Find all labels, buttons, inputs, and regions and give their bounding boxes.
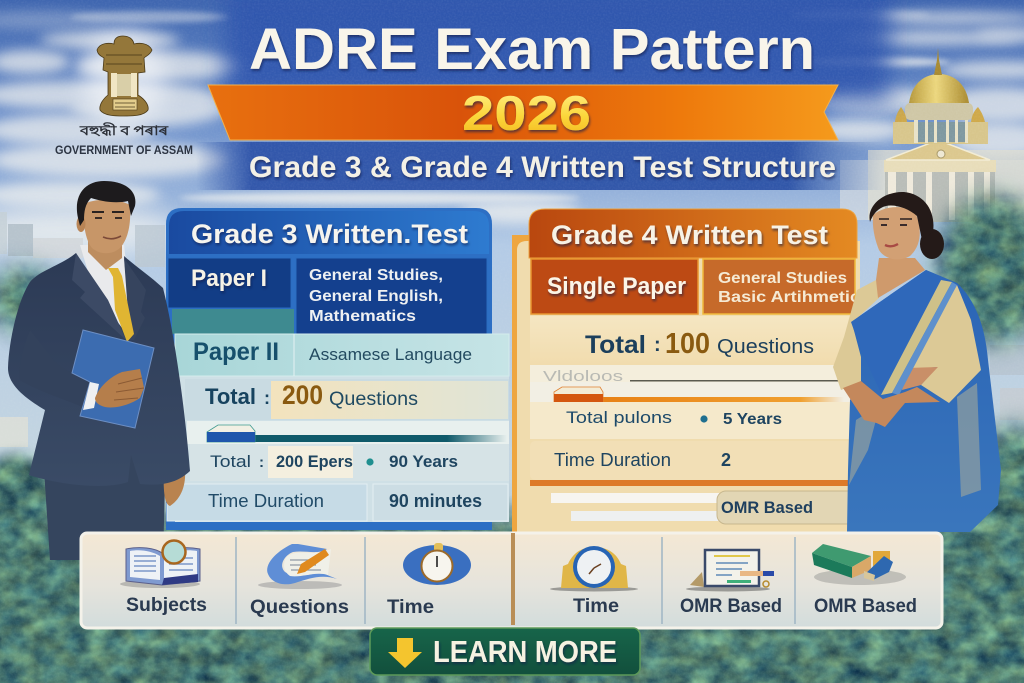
single paper subjects: Basic Artihmetic	[718, 289, 860, 306]
city buildings left	[0, 212, 165, 447]
midriff	[902, 367, 938, 390]
icon: paper and pencil	[258, 544, 342, 589]
panel background	[166, 208, 492, 530]
paper I subjects: General Studies,	[309, 267, 443, 284]
government label: GOVERNMENT OF ASSAM	[55, 143, 193, 157]
paper I cell	[168, 258, 291, 308]
time duration row	[530, 441, 860, 480]
icon: tablet with pen	[686, 550, 774, 592]
icon: stacked books	[812, 544, 906, 585]
figure: woman in blue saree	[833, 192, 1001, 532]
saree pallu	[851, 270, 956, 395]
single paper subjects: General Studies	[718, 270, 847, 287]
neck	[876, 258, 925, 298]
neck and shirt	[80, 245, 133, 345]
total papers row: 90 Years	[389, 452, 458, 471]
divider strip with book tab	[187, 421, 509, 444]
motto line: বহুদ্ধী ব পৰাৰ	[79, 122, 169, 138]
bullet	[700, 415, 708, 423]
total papers row: 200 Epers	[276, 452, 353, 471]
item: OMR based	[812, 544, 917, 617]
total pulons row	[530, 402, 860, 439]
item: subjects: Subjects	[126, 595, 207, 616]
total questions row	[530, 316, 860, 365]
total papers row: :	[259, 454, 264, 471]
eyes and smile	[92, 211, 124, 213]
icon: stopwatch on blue oval	[403, 543, 471, 585]
OMR based pill: OMR Based	[721, 498, 813, 517]
right blouse	[907, 285, 981, 403]
total questions row: Questions	[329, 389, 418, 410]
total questions row: Questions	[717, 336, 814, 358]
item: OMR based: OMR Based	[814, 596, 917, 617]
total questions row	[185, 379, 509, 420]
panel: grade 4 written test	[512, 209, 860, 533]
lapels	[72, 253, 126, 340]
trousers	[44, 445, 166, 560]
total pulons row: 5 Years	[723, 411, 782, 428]
tie	[108, 268, 134, 342]
gold stripe	[881, 280, 952, 395]
time duration row: Time Duration	[554, 450, 671, 470]
single paper subjects	[703, 259, 860, 314]
panel: grade 3 written test	[166, 208, 509, 530]
divider strip with book tab	[554, 387, 844, 402]
time duration row: 2	[721, 450, 731, 470]
total pulons row: Total pulons	[566, 408, 672, 427]
clouds	[0, 10, 1024, 255]
grade 3 header: Grade 3 Written.Test	[191, 219, 468, 249]
item: time: Time	[387, 597, 434, 618]
item: time	[387, 543, 471, 618]
time duration row	[167, 484, 508, 521]
total papers row: Total	[210, 452, 251, 471]
saree body	[847, 270, 1001, 532]
title backdrop	[225, 0, 890, 102]
icon: open book with magnifier	[120, 540, 200, 588]
man's lower hand	[164, 466, 185, 506]
single paper cell: Single Paper	[547, 273, 686, 300]
total papers row	[190, 444, 509, 481]
item: OMR based	[680, 550, 782, 617]
paper I subjects: General English,	[309, 288, 443, 305]
shirt cuff	[83, 382, 99, 410]
bullet	[366, 458, 374, 466]
figure: man in suit	[8, 181, 190, 560]
emblem: government of Assam	[55, 29, 193, 157]
single paper cell	[531, 259, 698, 314]
face	[83, 200, 130, 253]
year: 2026	[462, 87, 591, 141]
grade 4 header	[529, 209, 857, 258]
OMR based pill	[717, 491, 857, 524]
subtitle: Grade 3 & Grade 4 Written Test Structure	[249, 151, 836, 184]
grey saree folds	[849, 383, 981, 497]
paper I subjects	[296, 258, 487, 334]
strip background	[81, 533, 942, 628]
total questions row: :	[654, 334, 661, 356]
title: ADRE Exam Pattern	[249, 17, 815, 82]
sleeve	[19, 330, 98, 410]
forearms and hands	[843, 381, 940, 427]
jacket	[8, 253, 190, 486]
time duration row: 90 minutes	[389, 491, 482, 511]
face	[873, 207, 920, 259]
item: OMR based: OMR Based	[680, 596, 782, 617]
total questions row: Total	[585, 331, 646, 359]
item: time: Time	[573, 596, 619, 617]
icon: national emblem	[82, 29, 166, 125]
hair	[869, 192, 933, 240]
bun	[920, 229, 944, 259]
eyes and lips	[879, 218, 912, 220]
capitol building	[840, 48, 1024, 222]
paper I subjects: Mathematics	[309, 308, 416, 325]
faded ghost text strip	[530, 365, 860, 402]
item: subjects	[120, 540, 207, 616]
total questions row: 100	[665, 328, 710, 360]
learn more button	[370, 628, 640, 675]
paper II row: Paper II	[193, 338, 279, 366]
icon: gold clock	[550, 546, 638, 592]
item: questions: Questions	[250, 597, 349, 618]
item: time	[550, 546, 638, 617]
left blouse sleeve	[833, 280, 879, 390]
grade 4 header: Grade 4 Written Test	[551, 220, 828, 250]
icon strip	[81, 533, 942, 628]
item: questions	[250, 544, 349, 618]
total questions row: 200	[282, 380, 323, 410]
icon: down arrow	[388, 638, 422, 668]
subtitle band	[196, 142, 886, 190]
city buildings right	[990, 345, 1024, 420]
time duration row: Time Duration	[208, 491, 324, 511]
hair	[77, 181, 135, 226]
paper II row: Assamese Language	[309, 345, 472, 364]
paper I cell: Paper I	[191, 265, 267, 292]
back card	[512, 235, 860, 533]
learn more button: LEARN MORE	[433, 634, 617, 669]
blue folder	[72, 330, 154, 428]
cell dividers	[236, 537, 795, 624]
total questions row: :	[264, 388, 270, 408]
man's hand on folder	[95, 369, 144, 408]
faded ghost text strip: Vldoloos	[543, 368, 623, 385]
forest and trees	[0, 176, 1024, 683]
total questions row: Total	[205, 384, 256, 409]
paper II row	[175, 334, 509, 376]
year ribbon	[208, 85, 838, 141]
grade 3 header	[169, 211, 489, 254]
